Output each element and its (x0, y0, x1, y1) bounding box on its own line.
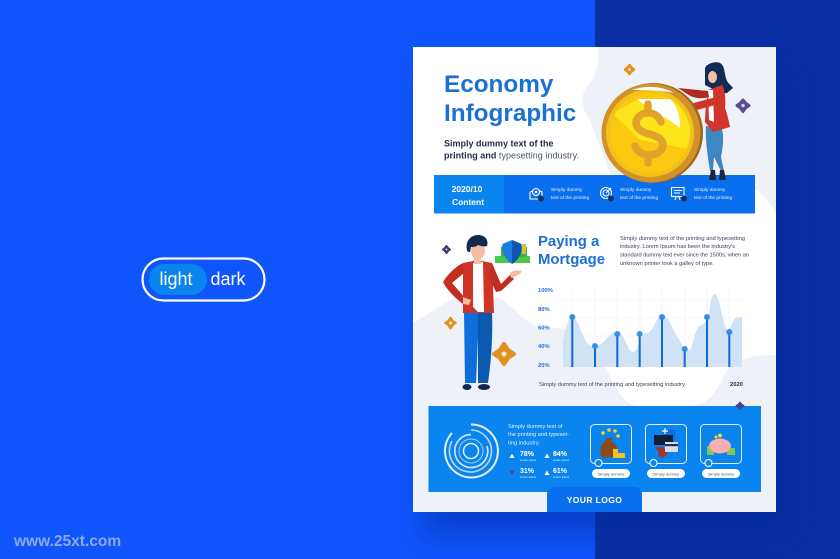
y axis labels (538, 288, 553, 369)
icon: woman (678, 62, 733, 180)
title: Infographic (444, 100, 576, 127)
icon: small sparkle on panel (736, 402, 744, 409)
text block: mortgage description: standard dummy text ever since the 1500s, when an (620, 252, 749, 258)
text: item three (694, 187, 732, 201)
band: content strip: 2020/10 (452, 184, 483, 194)
text: item three: text of the printing (694, 195, 732, 201)
icon: orange sparkle large (494, 344, 514, 364)
logo tab: YOUR LOGO (567, 495, 622, 505)
text block: mortgage description: Simply dummy text of the printing and typesetting (620, 236, 745, 242)
title (444, 71, 576, 127)
stats (510, 451, 570, 479)
card: credit cards: Simply dummy (653, 472, 679, 476)
stats: 31% (520, 468, 535, 475)
heading: paying a mortgage: Paying a (538, 234, 600, 250)
text: item three: Simply dummy (694, 187, 726, 193)
card: money bag (590, 424, 632, 478)
subtitle: printing and typesetting industry. (444, 150, 579, 160)
icon: orange sparkle small (446, 318, 456, 328)
icon: mail (530, 188, 544, 202)
icon: shield with money (495, 240, 530, 264)
card shadow (425, 70, 790, 535)
background right (595, 0, 840, 559)
stats: 78% (520, 451, 535, 458)
icon: gold coin (602, 83, 703, 183)
card: piggy bank (700, 424, 742, 478)
y axis labels: 100% (538, 288, 553, 294)
text: item two: Simply dummy (620, 187, 652, 193)
stats: Lorem ipsum (520, 475, 537, 479)
pins (569, 314, 732, 367)
panel: infographic card (413, 47, 776, 512)
chart caption: Simply dummy text of the printing and typesetting industry. (539, 382, 686, 388)
stats: 61% (553, 468, 568, 475)
text block: mortgage description: industry. Lorem Ipsum has been the industry's (620, 244, 735, 250)
text: item two (620, 187, 658, 201)
stats: Lorem ipsum (553, 458, 570, 462)
heading: paying a mortgage: Mortgage (538, 252, 605, 268)
card: money bag: Simply dummy (598, 472, 624, 476)
toggle: light dark (142, 258, 264, 300)
band: content strip: Content (452, 197, 484, 207)
icon: orange sparkle top (625, 65, 634, 74)
chart year: 2020 (730, 382, 743, 388)
subtitle (444, 138, 579, 160)
icon: purple sparkle left (443, 246, 450, 253)
text: stats description: Simply dummy text of (508, 424, 563, 430)
chart: area and pins (538, 288, 742, 369)
band: content strip (434, 175, 755, 214)
icon: certificate (672, 188, 687, 202)
text: item one (551, 187, 589, 201)
icon: man (443, 235, 522, 390)
dollar sign (635, 104, 663, 163)
y axis labels: 40% (538, 344, 550, 350)
subtitle: Simply dummy text of the (444, 138, 554, 148)
text: item one: Simply dummy (551, 187, 583, 193)
logo tab (547, 487, 642, 512)
y axis labels: 20% (538, 363, 550, 369)
text: stats description: ting industry. (508, 440, 540, 446)
watermark: www.25xt.com (13, 533, 121, 550)
icon: purple sparkle (737, 100, 749, 112)
text block: mortgage description: unknown printer took a galley of type. (620, 261, 714, 267)
stats: Lorem ipsum (553, 475, 570, 479)
toggle: light dark: light (159, 269, 193, 289)
text: stats description: the printing and typeset- (508, 432, 569, 438)
text: item one: text of the printing (551, 195, 589, 201)
stats: 84% (553, 451, 568, 458)
y axis labels: 60% (538, 326, 550, 332)
y axis labels: 80% (538, 307, 550, 313)
card: piggy bank: Simply dummy (708, 472, 734, 476)
text: item two: text of the printing (620, 195, 658, 201)
text: stats description (508, 424, 569, 446)
heading: paying a mortgage (538, 234, 605, 268)
stats: Lorem ipsum (520, 458, 537, 462)
toggle: light dark: dark (210, 269, 247, 289)
radial gauge (445, 424, 498, 477)
title: Economy (444, 71, 554, 98)
text block: mortgage description (620, 236, 749, 267)
icon: target (600, 188, 614, 202)
panel: blue stats (428, 406, 761, 492)
area series (563, 294, 742, 367)
card: credit cards (646, 424, 686, 478)
